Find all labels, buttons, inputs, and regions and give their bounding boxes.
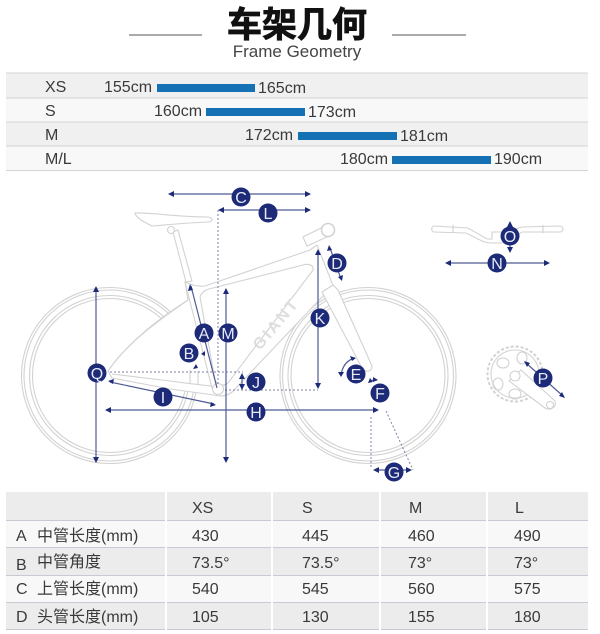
badge: N bbox=[488, 254, 506, 273]
row C: 545 bbox=[302, 581, 329, 598]
row B: 中管角度 bbox=[37, 553, 101, 571]
dimension: G bbox=[373, 467, 412, 473]
dimension: I bbox=[108, 379, 216, 407]
dimension: J bbox=[239, 373, 245, 390]
dimension: A bbox=[188, 284, 217, 388]
row: M/L bbox=[45, 151, 542, 168]
row B: 73° bbox=[408, 555, 432, 572]
row B: B bbox=[16, 557, 27, 574]
badge: K bbox=[310, 308, 330, 328]
badge: I: I bbox=[161, 390, 165, 407]
handlebar bbox=[432, 225, 563, 243]
badge: Q bbox=[88, 364, 106, 383]
badge: B bbox=[180, 344, 198, 363]
row A: 中管长度(mm) bbox=[37, 527, 138, 545]
row A: 445 bbox=[302, 528, 329, 545]
row D: 105 bbox=[192, 609, 219, 626]
badge: A bbox=[194, 324, 214, 343]
row: M bbox=[45, 127, 448, 145]
badge: F: F bbox=[375, 386, 385, 403]
row D bbox=[16, 608, 541, 626]
row: S: 173cm bbox=[308, 104, 356, 121]
dimension: B bbox=[193, 351, 205, 369]
row C: 560 bbox=[408, 581, 435, 598]
rear wheel bbox=[22, 288, 198, 464]
row: XS bbox=[45, 79, 306, 97]
badge: L: L bbox=[264, 206, 273, 223]
stem bbox=[303, 224, 334, 246]
dimension: L bbox=[218, 207, 311, 213]
seatpost bbox=[168, 226, 192, 282]
row B bbox=[16, 553, 538, 574]
geometry table bbox=[6, 492, 588, 630]
row A: 430 bbox=[192, 528, 219, 545]
dimension: K bbox=[315, 249, 321, 389]
row: XS: 165cm bbox=[258, 80, 306, 97]
row: S bbox=[45, 103, 356, 121]
row D: 头管长度(mm) bbox=[37, 608, 138, 626]
badge: Q: Q bbox=[91, 366, 103, 383]
badge: O bbox=[500, 226, 520, 246]
badge: E: E bbox=[351, 367, 361, 384]
row B: 73° bbox=[514, 555, 538, 572]
badge: H: H bbox=[250, 405, 262, 422]
row C: 540 bbox=[192, 581, 219, 598]
title: 车架几何 bbox=[227, 6, 367, 45]
row: M/L: 180cm bbox=[340, 151, 388, 168]
badge: G: G bbox=[388, 465, 400, 482]
badge: C bbox=[232, 188, 250, 207]
saddle bbox=[135, 213, 212, 226]
row A bbox=[16, 527, 541, 545]
badge: J: J bbox=[252, 375, 260, 392]
badge: O: O bbox=[504, 229, 516, 246]
row: M/L: M/L bbox=[45, 151, 72, 168]
table header: S bbox=[302, 500, 313, 517]
row B: 73.5° bbox=[302, 555, 340, 572]
badge: I bbox=[154, 388, 172, 407]
badge: P bbox=[534, 368, 552, 388]
table header: XS bbox=[192, 500, 213, 517]
row A: A bbox=[16, 528, 27, 545]
row D: 180 bbox=[514, 609, 541, 626]
row: S: 160cm bbox=[154, 103, 202, 120]
row C: C bbox=[16, 581, 28, 598]
row A: 460 bbox=[408, 528, 435, 545]
badge: F bbox=[370, 384, 390, 403]
row: M: 172cm bbox=[245, 127, 293, 144]
dimension: O bbox=[507, 221, 513, 253]
row: S: S bbox=[45, 103, 56, 120]
dimension: M bbox=[223, 288, 229, 463]
badge: H bbox=[246, 402, 266, 422]
badge: G bbox=[384, 462, 404, 482]
badge: C: C bbox=[235, 190, 247, 207]
row C bbox=[16, 580, 541, 598]
dimension: H bbox=[105, 407, 379, 413]
row: M/L: 190cm bbox=[494, 151, 542, 168]
badge: M bbox=[218, 324, 238, 343]
table header: L bbox=[515, 500, 524, 517]
row D: 130 bbox=[302, 609, 329, 626]
row: XS: XS bbox=[45, 79, 66, 96]
dimension: C bbox=[168, 191, 311, 197]
dimension: P bbox=[524, 361, 565, 398]
table header bbox=[192, 500, 524, 517]
row: M: M bbox=[45, 127, 58, 144]
badge: B: B bbox=[184, 346, 194, 363]
bike diagram bbox=[22, 188, 565, 482]
title: Frame Geometry bbox=[233, 42, 362, 61]
badge: L bbox=[258, 204, 278, 223]
dimension: F bbox=[368, 377, 378, 383]
fork bbox=[322, 285, 372, 371]
chainring bbox=[488, 346, 555, 409]
GIANT frame lettering: GIANT bbox=[250, 295, 303, 354]
row A: 490 bbox=[514, 528, 541, 545]
badge: N: N bbox=[491, 256, 503, 273]
row C: 上管长度(mm) bbox=[37, 580, 138, 598]
dimension: D bbox=[327, 245, 343, 281]
badge: E bbox=[346, 364, 366, 384]
table header: M bbox=[409, 500, 422, 517]
badge: A: A bbox=[199, 326, 210, 343]
size range chart bbox=[6, 73, 588, 170]
dotted guide lines bbox=[110, 210, 413, 470]
dimension: Q bbox=[93, 286, 99, 463]
row D: D bbox=[16, 609, 28, 626]
front wheel bbox=[280, 288, 456, 464]
badge: J bbox=[246, 372, 266, 392]
row: M: 181cm bbox=[400, 128, 448, 145]
frame bbox=[108, 245, 334, 396]
badge: M: M bbox=[221, 326, 235, 343]
dimension: E bbox=[338, 356, 356, 377]
row D: 155 bbox=[408, 609, 435, 626]
badge: D bbox=[328, 254, 346, 273]
badge: P: P bbox=[538, 371, 548, 388]
row C: 575 bbox=[514, 581, 541, 598]
title bbox=[129, 6, 466, 61]
row B: 73.5° bbox=[192, 555, 230, 572]
dimension: N bbox=[445, 260, 550, 266]
row: XS: 155cm bbox=[104, 79, 152, 96]
badge: D: D bbox=[331, 256, 343, 273]
badge: K: K bbox=[315, 311, 326, 328]
